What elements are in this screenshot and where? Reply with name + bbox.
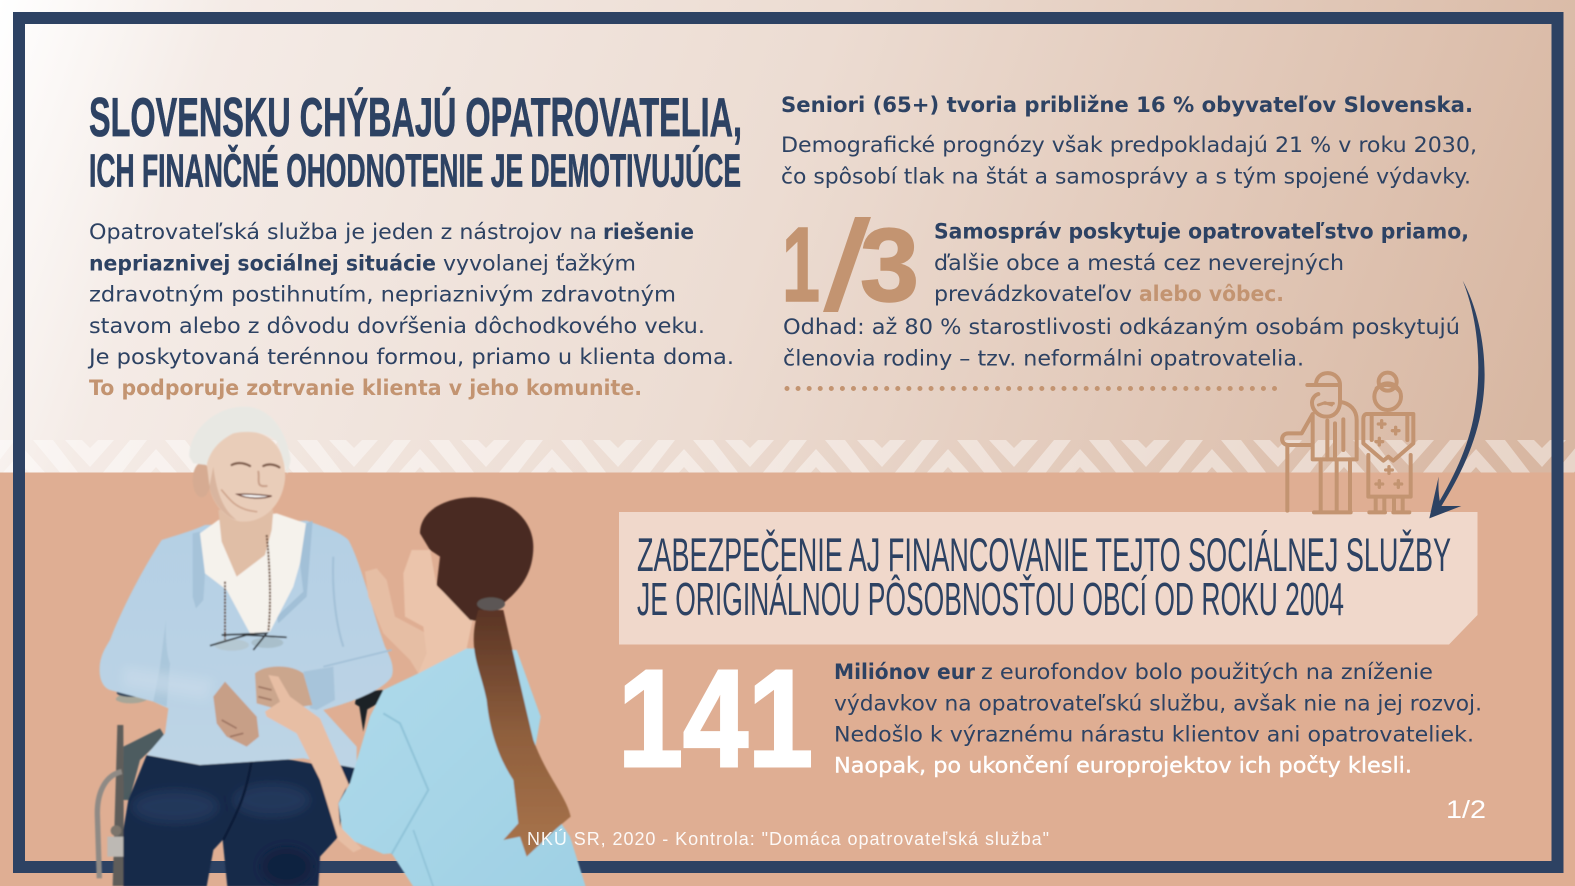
nurse hair bbox=[420, 497, 533, 622]
scrub sleeve fold bbox=[383, 713, 428, 854]
hair tie bbox=[477, 597, 505, 611]
text block: municipalities: Odhad: až 80 % starostlivosti odkázaným osobám poskytujú bbox=[783, 315, 1460, 339]
text block: municipalities: Samospráv poskytuje opatrovateľstvo priamo, bbox=[934, 220, 1469, 244]
text block: seniors statistic: Seniori (65+) tvoria približne 16 % obyvateľov Slovenska. bbox=[781, 93, 1473, 117]
wheelchair bbox=[97, 688, 383, 886]
big number: 141: 141 bbox=[618, 642, 813, 796]
title bbox=[89, 86, 742, 196]
facial features bbox=[222, 463, 279, 512]
text block: intro paragraph: zdravotným postihnutím, nepriaznivým zdravotným bbox=[89, 283, 676, 307]
text block: eurofunds: Naopak, po ukončení europrojektov ich počty klesli. bbox=[834, 754, 1412, 778]
decorative chevron band bbox=[0, 440, 1575, 472]
nurse scrubs bbox=[338, 648, 586, 886]
jeans bbox=[123, 738, 357, 886]
callout heading bbox=[637, 528, 1451, 625]
big number: 1/3 bbox=[782, 206, 919, 324]
face bbox=[207, 431, 285, 522]
cardigan bbox=[100, 521, 393, 768]
text block: municipalities: ďalšie obce a mestá cez neverejných bbox=[934, 251, 1344, 275]
photo: elderly woman and nurse bbox=[97, 407, 586, 886]
text block: eurofunds: výdavkov na opatrovateľskú službu, avšak nie na jej rozvoj. bbox=[834, 692, 1482, 716]
text block: eurofunds: Miliónov eur bbox=[834, 660, 976, 684]
text block: municipalities: členovia rodiny – tzv. neformálni opatrovatelia. bbox=[783, 346, 1304, 370]
text block: intro paragraph: vyvolanej ťažkým bbox=[443, 252, 636, 276]
text block: municipalities: alebo vôbec. bbox=[1139, 282, 1284, 306]
text block: intro paragraph: Je poskytovaná terénnou formou, priamo u klienta doma. bbox=[87, 345, 734, 369]
callout box bbox=[619, 512, 1478, 644]
shirt bbox=[200, 513, 306, 633]
nurse face and neck bbox=[403, 550, 473, 673]
text block: intro paragraph: To podporuje zotrvanie klienta v jeho komunite. bbox=[89, 376, 642, 400]
icon: elderly couple bbox=[1282, 373, 1413, 512]
nurse upper arm bbox=[365, 568, 430, 673]
neck bbox=[218, 510, 273, 577]
background: gradient upper area bbox=[0, 0, 1575, 473]
background: salmon lower area bbox=[0, 472, 1575, 886]
text block: seniors statistic bbox=[781, 93, 1477, 188]
text block: intro paragraph: stavom alebo z dôvodu dovŕšenia dôchodkového veku. bbox=[89, 314, 705, 338]
title: SLOVENSKU CHÝBAJÚ OPATROVATELIA, bbox=[89, 86, 742, 148]
text block: intro paragraph: riešenie bbox=[603, 220, 694, 244]
text block: eurofunds: z eurofondov bolo použitých na zníženie bbox=[981, 660, 1433, 684]
ear bbox=[193, 463, 211, 497]
big number: 1/3: 1 bbox=[782, 206, 820, 324]
text block: municipalities bbox=[783, 220, 1469, 370]
nurse arm and hand bbox=[265, 675, 362, 852]
big number: 1/3: 3 bbox=[860, 208, 919, 324]
ponytail bbox=[474, 610, 571, 857]
text block: seniors statistic: čo spôsobí tlak na štát a samosprávy a s tým spojené výdavky. bbox=[781, 164, 1471, 188]
text block: intro paragraph: nepriaznivej sociálnej situácie bbox=[89, 252, 436, 276]
white hair bbox=[189, 407, 291, 474]
title: ICH FINANČNÉ OHODNOTENIE JE DEMOTIVUJÚCE bbox=[89, 144, 741, 196]
necklace and glasses bbox=[210, 535, 287, 651]
source note: NKÚ SR, 2020 - Kontrola: "Domáca opatrovateľská služba" bbox=[527, 828, 1049, 849]
arrow bbox=[1429, 281, 1485, 518]
text block: intro paragraph bbox=[87, 220, 734, 400]
text block: seniors statistic: Demografické prognózy však predpokladajú 21 % v roku 2030, bbox=[781, 133, 1477, 157]
text block: eurofunds bbox=[834, 660, 1482, 778]
text block: municipalities: prevádzkovateľov bbox=[934, 282, 1132, 306]
page number: 1/2 bbox=[1446, 796, 1486, 824]
text block: intro paragraph: Opatrovateľská služba je jeden z nástrojov na bbox=[89, 220, 597, 244]
text block: eurofunds: Nedošlo k výraznému nárastu klientov ani opatrovateliek. bbox=[834, 722, 1474, 746]
cardigan shading bbox=[153, 620, 170, 707]
elder hands bbox=[213, 666, 312, 747]
